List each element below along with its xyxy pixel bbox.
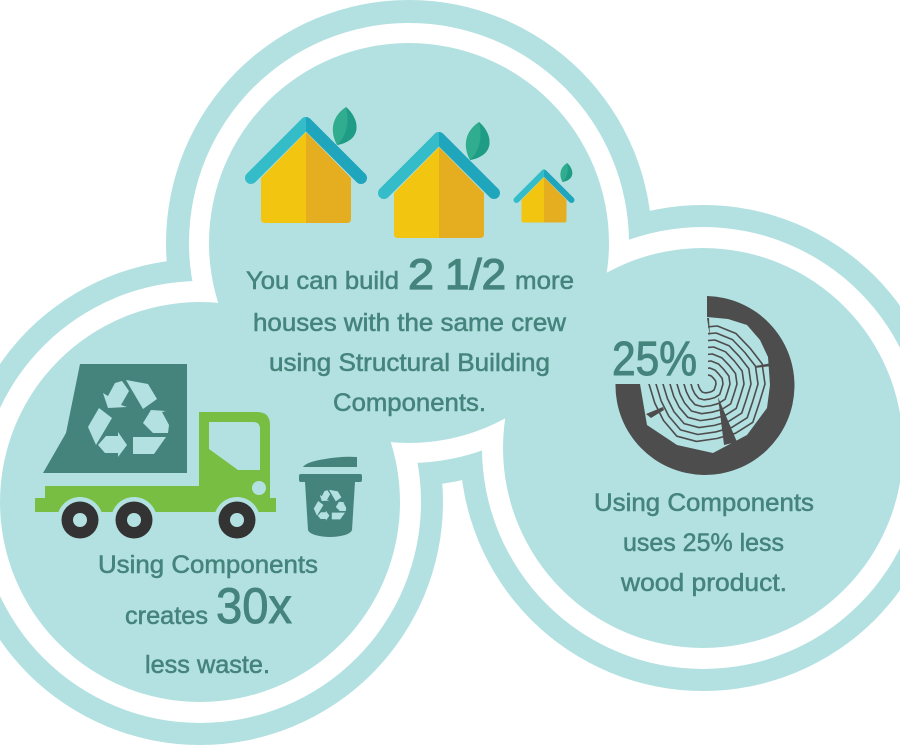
icon: recycling truck — [35, 364, 276, 543]
icon: small house with leaf — [516, 163, 572, 222]
text: waste statement — [98, 551, 318, 679]
text: houses statement: houses with the same crew — [253, 309, 567, 337]
text: houses statement: using Structural Building — [269, 349, 550, 377]
text: waste statement: creates — [125, 602, 208, 630]
text: waste statement: less waste. — [145, 651, 270, 679]
text: waste statement: Using Components — [98, 551, 318, 579]
text: wood statement: wood product. — [620, 569, 787, 597]
icon: recycling bin — [299, 457, 362, 537]
text: houses statement: 2 — [408, 251, 434, 299]
panel: houses — [246, 107, 574, 417]
text: waste statement: 30x — [216, 578, 292, 634]
text: wood statement: Using Components — [594, 489, 814, 517]
chart: 25% log cross-section — [615, 296, 794, 475]
text: 25% figure: 25% — [612, 333, 697, 386]
text: houses statement: You can build — [246, 267, 399, 295]
text: houses statement — [246, 251, 574, 417]
text: houses statement: more — [515, 267, 574, 295]
text: wood statement: uses 25% less — [623, 529, 784, 557]
text: houses statement: 1/2 — [445, 251, 506, 299]
panel: wood — [594, 296, 814, 597]
text: wood statement — [594, 489, 814, 597]
icon: medium house with leaf — [384, 122, 494, 238]
text: houses statement: Components. — [333, 389, 486, 417]
icon: large house with leaf — [251, 107, 361, 223]
panel: waste — [35, 364, 362, 679]
